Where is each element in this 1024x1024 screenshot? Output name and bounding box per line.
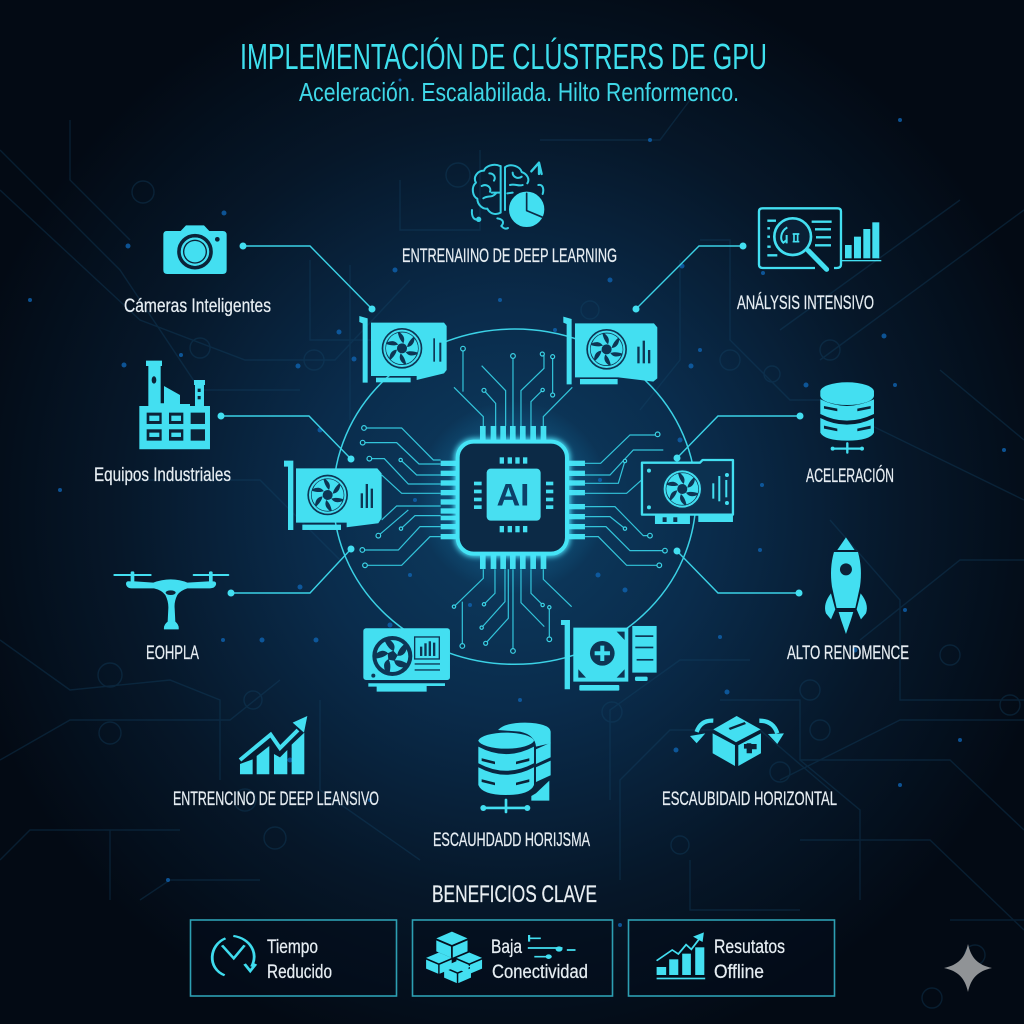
AI label: AI [497, 477, 529, 512]
text: baja: Baja [491, 937, 522, 958]
icon: growth chart [240, 716, 307, 774]
icon: drone [113, 571, 229, 629]
GPU card bottom left [363, 628, 450, 692]
icon: analysis screen [759, 208, 881, 269]
AI core square [487, 469, 541, 521]
icon: rising bars [657, 932, 705, 979]
icon: database [820, 382, 874, 453]
subtitle: Aceleración. Escalabiilada. Hilto Renformenco. [299, 77, 739, 107]
background star dots [28, 78, 1006, 927]
icon: box with arrows [690, 716, 784, 766]
icon: brain and pie [472, 163, 543, 229]
text: resultados: Resutatos [714, 937, 785, 958]
title: IMPLEMENTACIÓN DE CLÚSTRERS DE GPU [240, 36, 767, 77]
icon: double database [478, 723, 551, 812]
chip pins [441, 426, 585, 569]
central hub: ring, traces, chip and GPUs [284, 316, 733, 692]
connector lines [221, 246, 800, 593]
panel: resultados offline [628, 920, 834, 996]
GPU card bottom right [561, 620, 657, 691]
GPU card top right [563, 317, 657, 384]
section heading: benefits: BENEFICIOS CLAVE [432, 881, 597, 908]
label: industrial: Equipos Industriales [94, 465, 231, 486]
GPU card top left [359, 316, 447, 383]
glow behind chip [416, 401, 609, 594]
orbit ring [333, 329, 696, 664]
GPU card right [642, 460, 733, 524]
GPU card left [284, 461, 382, 530]
text: conectividad: Conectividad [492, 962, 588, 983]
label: escalabilidad horizontal: ESCAUBIDAID HORIZONTAL [662, 789, 837, 810]
chip glow [458, 442, 567, 554]
chip body [458, 442, 567, 554]
text: tiempo: Tiempo [267, 937, 318, 958]
icon: factory [139, 361, 210, 449]
icon: camera [163, 225, 227, 274]
label: cameras: Cámeras Inteligentes [124, 296, 271, 317]
watermark star [944, 944, 992, 992]
label: aceleracion: ACELERACIÓN [806, 465, 894, 487]
label: deep learning: ENTRENAIINO DE DEEP LEARNING [402, 246, 617, 267]
icon: cubes [426, 932, 576, 983]
circuit traces [362, 349, 665, 651]
trace end pads [360, 346, 667, 653]
connector end dots [218, 242, 804, 596]
label: analysis: ANÁLYSIS INTENSIVO [737, 293, 874, 314]
panel: tiempo reducido [190, 920, 396, 996]
text: offline: Offline [714, 962, 764, 983]
icon: clock [212, 936, 256, 975]
label: eohpla: EOHPLA [146, 643, 199, 664]
panel: baja conectividad [412, 920, 612, 996]
chip small pads [474, 457, 553, 532]
label: deep leansivo: ENTRENCINO DE DEEP LEANSIVO [173, 789, 379, 810]
label: escalabilidad horisma: ESCAUHDADD HORIJSMA [433, 830, 590, 851]
icon: rocket [825, 537, 867, 634]
text: reducido: Reducido [267, 962, 332, 983]
label: alto rendimiento: ALTO RENDMENCE [787, 643, 909, 664]
